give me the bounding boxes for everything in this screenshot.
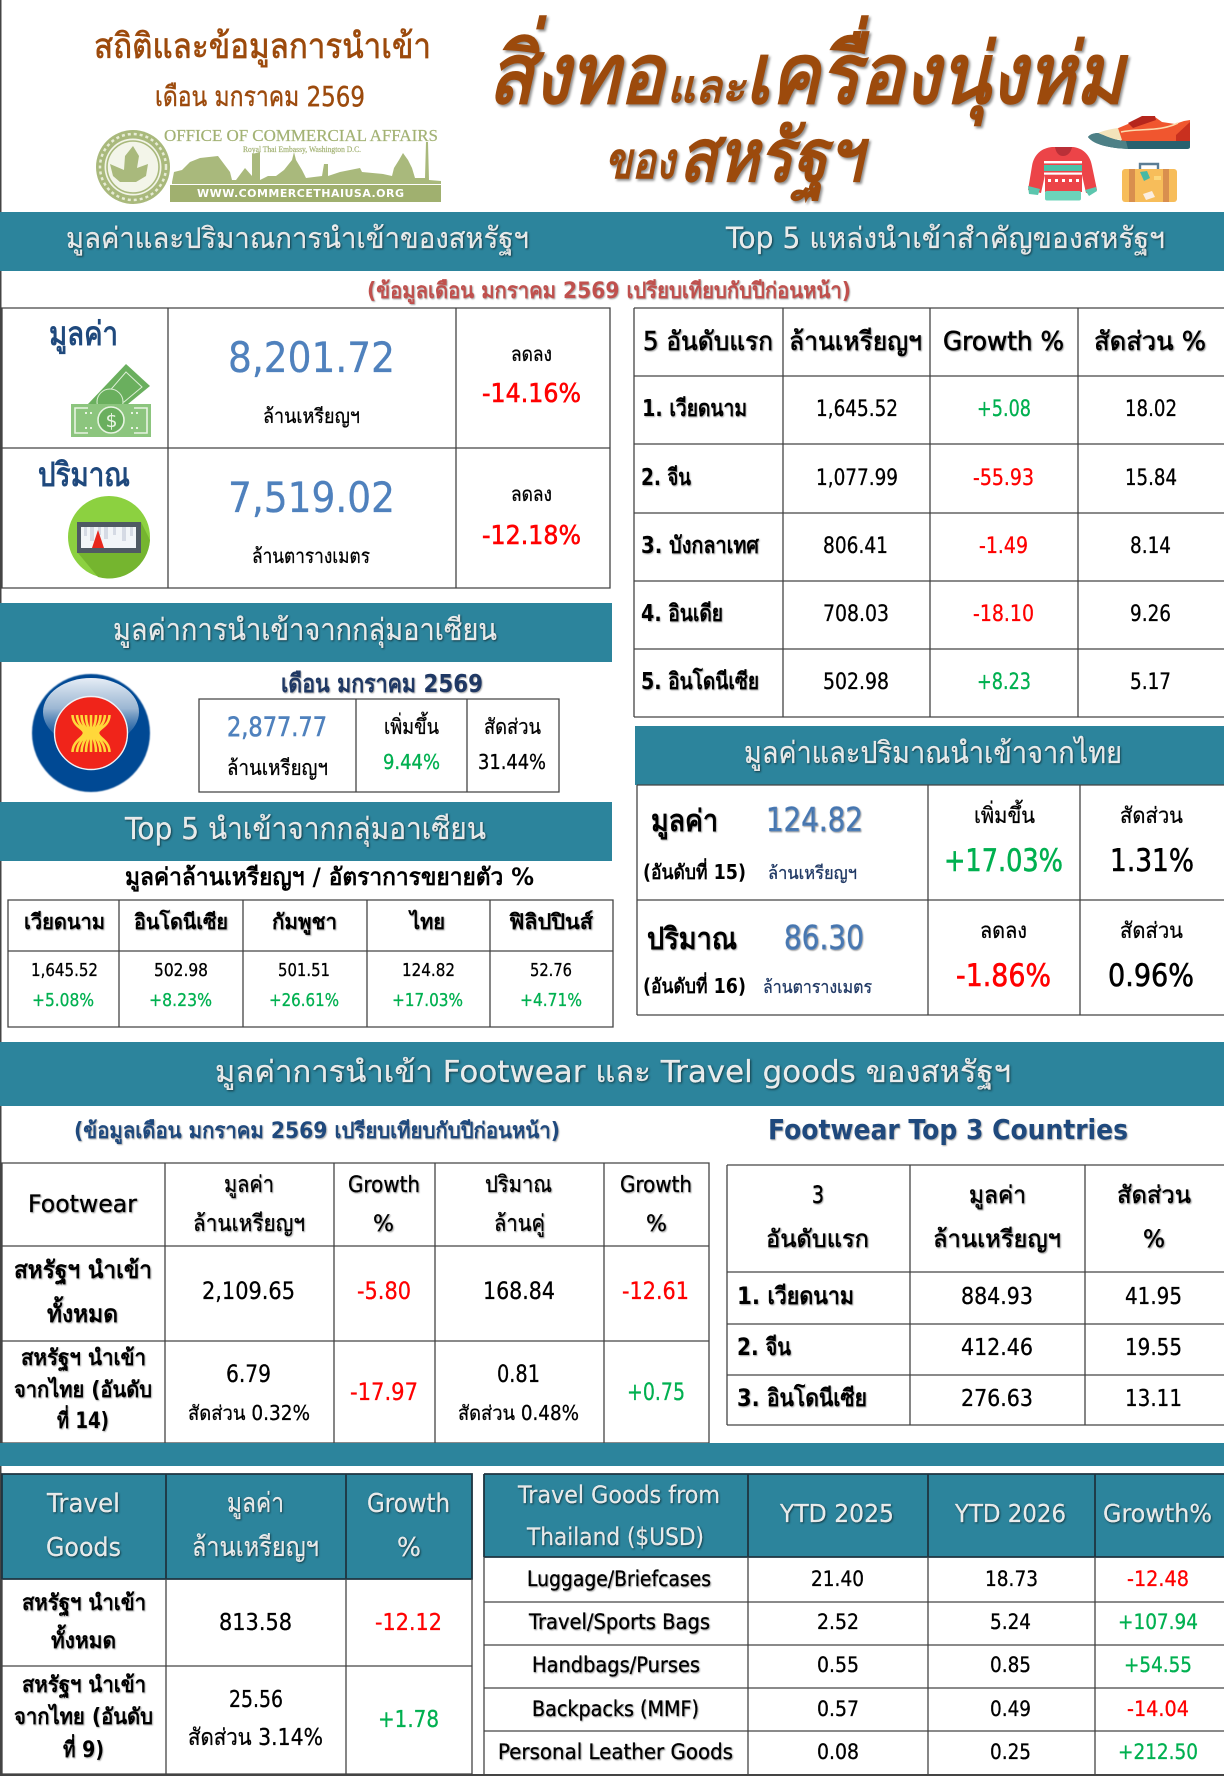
- table: travel goods from Thailand: Growth%: [1103, 1499, 1212, 1528]
- Thailand volume row: 0.96%: [1108, 958, 1194, 994]
- ASEAN month and stats table: [199, 669, 559, 792]
- section header band: value and volume / top 5 sources: Top 5 แหล่งนำเข้าสำคัญของสหรัฐฯ: [725, 221, 1165, 256]
- volume row: [38, 455, 581, 568]
- table: top 5 US import sources: 1. เวียดนาม: [642, 396, 747, 422]
- Thailand value row: [643, 800, 1194, 884]
- table: travel goods from Thailand: +107.94: [1118, 1610, 1198, 1634]
- table: travel goods imports: ที่ 9): [63, 1733, 104, 1763]
- icon: money bills: [71, 364, 151, 437]
- section header band: value and volume / top 5 sources: มูลค่าและปริมาณการนำเข้าของสหรัฐฯ: [66, 221, 529, 256]
- ASEAN month and stats table: สัดส่วน: [484, 715, 541, 739]
- table: travel goods from Thailand: Thailand ($USD): [526, 1523, 704, 1551]
- table: travel goods imports: Travel: [46, 1489, 120, 1519]
- table: footwear top 3 countries: อันดับแรก: [766, 1225, 869, 1253]
- Thailand value row: (อันดับที่ 15): [643, 857, 746, 884]
- table: travel goods from Thailand: 0.55: [817, 1653, 859, 1677]
- table: footwear imports: ปริมาณ: [485, 1172, 552, 1198]
- Thailand value row: 124.82: [766, 800, 863, 839]
- volume row: -12.18%: [482, 521, 581, 551]
- table: top 5 ASEAN: ฟิลิปปินส์: [508, 910, 593, 934]
- note: data period: (ข้อมูลเดือน มกราคม 2569 เปรียบเทียบกับปีก่อนหน้า): [367, 279, 851, 305]
- table: travel goods from Thailand: Handbags/Purses: [532, 1653, 700, 1677]
- value row: [49, 314, 581, 428]
- table: top 5 US import sources: -55.93: [973, 466, 1034, 491]
- ASEAN month and stats table: เดือน มกราคม 2569: [281, 669, 483, 698]
- table: travel goods from Thailand: 0.08: [817, 1740, 859, 1764]
- panel: total value and volume: [2, 308, 610, 588]
- heading band: top 5 ASEAN: Top 5 นำเข้าจากกลุ่มอาเซียน: [124, 812, 486, 848]
- table: travel goods imports: -12.12: [375, 1610, 442, 1636]
- heading band: ASEAN: มูลค่าการนำเข้าจากกลุ่มอาเซียน: [113, 613, 497, 649]
- table: footwear imports: 2,109.65: [202, 1277, 295, 1305]
- table: top 5 ASEAN: ไทย: [408, 909, 445, 934]
- icon: sneaker: [1088, 116, 1190, 149]
- table: travel goods imports: 813.58: [219, 1610, 292, 1636]
- ASEAN month and stats table: 31.44%: [478, 750, 546, 774]
- table: travel goods from Thailand: -12.48: [1127, 1567, 1189, 1591]
- icon: suitcase: [1122, 164, 1177, 202]
- logo: office of commercial affairs: WWW.COMMERCETHAIUSA.ORG: [197, 187, 404, 200]
- table: travel goods from Thailand: Backpacks (MMF): [532, 1697, 699, 1721]
- table: footwear imports: 6.79: [226, 1360, 271, 1388]
- table: travel goods from Thailand: [484, 1474, 1224, 1774]
- table: top 5 ASEAN: 502.98: [154, 960, 208, 981]
- table: top 5 ASEAN: 124.82: [402, 960, 455, 981]
- table: footwear imports: 0.81: [497, 1360, 540, 1388]
- table: footwear top 3 countries: 1. เวียดนาม: [737, 1282, 854, 1310]
- table: top 5 US import sources: 1,645.52: [816, 397, 898, 422]
- header: statistics subtitle: [94, 27, 431, 113]
- table: top 5 US import sources: 806.41: [823, 534, 888, 559]
- table: travel goods imports: 25.56: [229, 1687, 283, 1713]
- table: top 5 US import sources: ล้านเหรียญฯ: [789, 327, 922, 357]
- Thailand value row: +17.03%: [944, 843, 1063, 879]
- Thailand volume row: ลดลง: [980, 919, 1027, 944]
- Thailand value row: 1.31%: [1110, 843, 1194, 879]
- table: travel goods imports: จากไทย (อันดับ: [14, 1703, 153, 1730]
- logo: office of commercial affairs: Royal Thai Embassy, Washington D.C.: [243, 145, 361, 154]
- table: top 5 US import sources: 8.14: [1130, 534, 1171, 559]
- heading band: ASEAN: [0, 603, 612, 662]
- table: travel goods from Thailand: Travel/Sports Bags: [528, 1610, 710, 1634]
- table: top 5 ASEAN: เวียดนาม: [24, 910, 105, 934]
- table: footwear imports: 168.84: [483, 1277, 555, 1305]
- icon: money bills: $: [106, 410, 118, 432]
- table: top 5 ASEAN: +26.61%: [269, 990, 339, 1011]
- table: travel goods imports: Goods: [46, 1533, 121, 1563]
- table: top 5 US import sources: 15.84: [1125, 466, 1177, 491]
- table: footwear top 3 countries: 3. อินโดนีเซีย: [737, 1383, 867, 1412]
- table: footwear top 3 countries: 3: [812, 1181, 824, 1209]
- table: travel goods from Thailand: 0.85: [990, 1653, 1031, 1677]
- table: travel goods imports: สหรัฐฯ นำเข้า: [22, 1591, 146, 1617]
- volume row: ลดลง: [511, 482, 552, 506]
- table: top 5 ASEAN: 1,645.52: [31, 960, 98, 981]
- volume row: 7,519.02: [228, 473, 395, 522]
- table: footwear top 3 countries: มูลค่า: [969, 1181, 1026, 1210]
- header: statistics subtitle: สถิติและข้อมูลการนำเข้า: [94, 27, 431, 67]
- value row: ลดลง: [511, 342, 552, 366]
- table: footwear top 3 countries: 41.95: [1125, 1284, 1182, 1310]
- table: top 5 US import sources: 5.17: [1130, 670, 1171, 695]
- table: travel goods from Thailand: Luggage/Briefcases: [527, 1567, 711, 1591]
- title: textiles and apparel of the US: สิ่งทอ: [488, 15, 668, 123]
- table: top 5 US import sources: 708.03: [823, 602, 889, 627]
- table: travel goods from Thailand: 18.73: [985, 1567, 1038, 1591]
- Thailand volume row: ล้านตารางเมตร: [763, 977, 872, 998]
- table: footwear top 3 countries: %: [1143, 1225, 1165, 1253]
- logo: office of commercial affairs: OFFICE OF COMMERCIAL AFFAIRS: [164, 126, 438, 145]
- ASEAN month and stats table: เพิ่มขึ้น: [384, 712, 439, 739]
- table: travel goods from Thailand: 2.52: [817, 1610, 859, 1634]
- table: footwear top 3 countries: 276.63: [961, 1386, 1033, 1412]
- table: travel goods imports: สหรัฐฯ นำเข้า: [22, 1673, 146, 1699]
- table: footwear top 3 countries: [727, 1165, 1224, 1425]
- table: travel goods imports: ทั้งหมด: [51, 1624, 116, 1654]
- title: textiles and apparel of the US: [488, 15, 1129, 204]
- table: top 5 ASEAN: 52.76: [530, 960, 572, 981]
- table: travel goods imports: +1.78: [378, 1707, 439, 1733]
- table: top 5 US import sources: 3. บังกลาเทศ: [641, 533, 759, 559]
- table: top 5 ASEAN: 501.51: [278, 960, 330, 981]
- table: travel goods from Thailand: +54.55: [1124, 1653, 1192, 1677]
- heading: footwear top 3 countries: Footwear Top 3 Countries: [768, 1113, 1128, 1146]
- table: top 5 ASEAN: [8, 900, 613, 1027]
- table: travel goods from Thailand: -14.04: [1127, 1697, 1189, 1721]
- table: travel goods imports: สัดส่วน 3.14%: [188, 1725, 323, 1751]
- heading band: top 5 ASEAN: [0, 802, 612, 861]
- table: top 5 ASEAN: +8.23%: [149, 990, 212, 1011]
- heading band: from Thailand: มูลค่าและปริมาณนำเข้าจากไทย: [744, 735, 1122, 771]
- table: travel goods imports: %: [397, 1533, 421, 1563]
- table: top 5 ASEAN: อินโดนีเซีย: [134, 909, 228, 934]
- value row: มูลค่า: [49, 314, 118, 355]
- table: travel goods from Thailand: 0.49: [990, 1697, 1031, 1721]
- table: footwear imports: Growth: [348, 1173, 420, 1198]
- value row: 8,201.72: [228, 333, 395, 382]
- table: footwear imports: ทั้งหมด: [47, 1295, 118, 1328]
- table: footwear imports: %: [373, 1212, 394, 1237]
- table: footwear imports: ที่ 14): [57, 1404, 109, 1434]
- table: top 5 US import sources: 2. จีน: [641, 465, 691, 491]
- table: footwear imports: -5.80: [357, 1277, 411, 1305]
- table: footwear imports: สัดส่วน 0.48%: [458, 1401, 579, 1425]
- icon: sweater: [1028, 147, 1097, 200]
- Thailand volume row: (อันดับที่ 16): [643, 971, 746, 998]
- icon: gauge: [68, 496, 150, 579]
- table: top 5 ASEAN: +17.03%: [392, 990, 463, 1011]
- panel: ASEAN import value: [0, 603, 612, 792]
- caption: value and growth rate: มูลค่าล้านเหรียญฯ / อัตราการขยายตัว %: [125, 863, 534, 892]
- table: top 5 US import sources: 18.02: [1125, 397, 1177, 422]
- title: textiles and apparel of the US: และ: [667, 60, 748, 113]
- table: travel goods imports: ล้านเหรียญฯ: [192, 1532, 319, 1563]
- table: top 5 ASEAN: กัมพูชา: [272, 910, 337, 936]
- table: footwear imports: สหรัฐฯ นำเข้า: [14, 1256, 152, 1286]
- Thailand volume row: สัดส่วน: [1120, 919, 1183, 944]
- logo: office of commercial affairs: [96, 126, 441, 204]
- title: textiles and apparel of the US: สหรัฐฯ: [679, 114, 870, 204]
- icon: ASEAN emblem: [32, 674, 150, 792]
- volume row: ปริมาณ: [38, 455, 130, 494]
- value row: -14.16%: [482, 379, 581, 409]
- Thailand volume row: [643, 918, 1194, 998]
- table: travel goods from Thailand: 21.40: [811, 1567, 864, 1591]
- table: footwear imports: จากไทย (อันดับ: [14, 1376, 152, 1403]
- table: top 5 US import sources: 502.98: [823, 670, 889, 695]
- section header band: value and volume / top 5 sources: [0, 212, 1224, 271]
- panel: top 5 from ASEAN: [0, 802, 613, 1027]
- table: footwear top 3 countries: 884.93: [961, 1284, 1033, 1310]
- value row: ล้านเหรียญฯ: [263, 404, 360, 428]
- table: footwear imports: สัดส่วน 0.32%: [188, 1401, 310, 1425]
- table: footwear imports: ล้านเหรียญฯ: [193, 1211, 305, 1237]
- table: footwear top 3 countries: ล้านเหรียญฯ: [933, 1225, 1061, 1253]
- table: top 5 US import sources: -1.49: [979, 534, 1028, 559]
- table: top 5 ASEAN: +4.71%: [520, 990, 582, 1011]
- header: statistics subtitle: เดือน มกราคม 2569: [155, 80, 365, 113]
- table: footwear imports: Growth: [620, 1173, 692, 1198]
- table: top 5 US import sources: +8.23: [977, 670, 1031, 695]
- section header band: footwear and travel goods: [0, 1042, 1224, 1106]
- table: footwear top 3 countries: 13.11: [1125, 1386, 1182, 1412]
- table: footwear imports: Footwear: [28, 1190, 137, 1218]
- ASEAN month and stats table: 9.44%: [383, 750, 440, 774]
- panel: value and volume from Thailand: [635, 726, 1224, 1015]
- table: footwear top 3 countries: สัดส่วน: [1117, 1181, 1191, 1209]
- table: top 5 US import sources: +5.08: [977, 397, 1031, 422]
- Thailand volume row: -1.86%: [956, 958, 1051, 994]
- table: travel goods imports: Growth: [367, 1489, 450, 1519]
- table: travel goods from Thailand: YTD 2025: [779, 1499, 894, 1528]
- Thailand value row: มูลค่า: [651, 804, 718, 840]
- Thailand value row: สัดส่วน: [1120, 804, 1183, 829]
- table: footwear imports: -17.97: [350, 1378, 418, 1406]
- table: top 5 US import sources: 5 อันดับแรก: [643, 327, 773, 357]
- table: travel goods from Thailand: +212.50: [1118, 1740, 1198, 1764]
- table: travel goods from Thailand: Travel Goods from: [517, 1481, 720, 1509]
- table: footwear imports: [2, 1163, 709, 1443]
- table: top 5 US import sources: -18.10: [973, 602, 1034, 627]
- ASEAN month and stats table: 2,877.77: [227, 712, 327, 743]
- table: travel goods from Thailand: YTD 2026: [954, 1499, 1066, 1528]
- table: footwear imports: -12.61: [622, 1277, 689, 1305]
- table: top 5 US import sources: สัดส่วน %: [1094, 327, 1206, 357]
- table: footwear imports: +0.75: [627, 1378, 685, 1406]
- table: travel goods imports: มูลค่า: [227, 1488, 284, 1519]
- title: textiles and apparel of the US: ของ: [605, 132, 678, 190]
- volume row: ล้านตารางเมตร: [252, 544, 370, 568]
- section header band: footwear and travel goods: มูลค่าการนำเข้า Footwear และ Travel goods ของสหรัฐฯ: [215, 1055, 1011, 1090]
- Thailand value row: เพิ่มขึ้น: [974, 800, 1035, 829]
- Thailand value row: ล้านเหรียญฯ: [768, 863, 857, 884]
- table: travel goods from Thailand: 5.24: [990, 1610, 1031, 1634]
- title: textiles and apparel of the US: เครื่องนุ่งห่ม: [745, 15, 1129, 127]
- Thailand volume row: ปริมาณ: [647, 922, 737, 957]
- table: footwear imports: สหรัฐฯ นำเข้า: [21, 1346, 146, 1372]
- table: top 5 US import sources: 9.26: [1130, 602, 1171, 627]
- table: top 5 US import sources: Growth %: [943, 327, 1064, 357]
- Thailand volume row: 86.30: [784, 918, 864, 957]
- table: top 5 US import sources: [634, 308, 1224, 717]
- heading band: from Thailand: [635, 726, 1224, 785]
- table: top 5 US import sources: 4. อินเดีย: [641, 601, 723, 627]
- table: footwear top 3 countries: 19.55: [1125, 1335, 1182, 1361]
- table: top 5 US import sources: 1,077.99: [816, 466, 898, 491]
- table: top 5 US import sources: 5. อินโดนีเซีย: [641, 667, 759, 695]
- table: footwear imports: มูลค่า: [224, 1172, 274, 1198]
- table: travel goods imports: [2, 1474, 472, 1774]
- table: travel goods from Thailand: Personal Leather Goods: [498, 1740, 733, 1764]
- table: footwear imports: %: [646, 1212, 667, 1237]
- table: footwear imports: ล้านคู่: [494, 1211, 545, 1237]
- note: footwear data period: (ข้อมูลเดือน มกราคม 2569 เปรียบเทียบกับปีก่อนหน้า): [74, 1119, 560, 1145]
- table: travel goods from Thailand: 0.57: [817, 1697, 859, 1721]
- table: top 5 ASEAN: +5.08%: [32, 990, 94, 1011]
- table: footwear top 3 countries: 2. จีน: [737, 1333, 791, 1361]
- table: footwear top 3 countries: 412.46: [961, 1335, 1033, 1361]
- table: travel goods from Thailand: 0.25: [990, 1740, 1031, 1764]
- ASEAN month and stats table: ล้านเหรียญฯ: [227, 756, 328, 780]
